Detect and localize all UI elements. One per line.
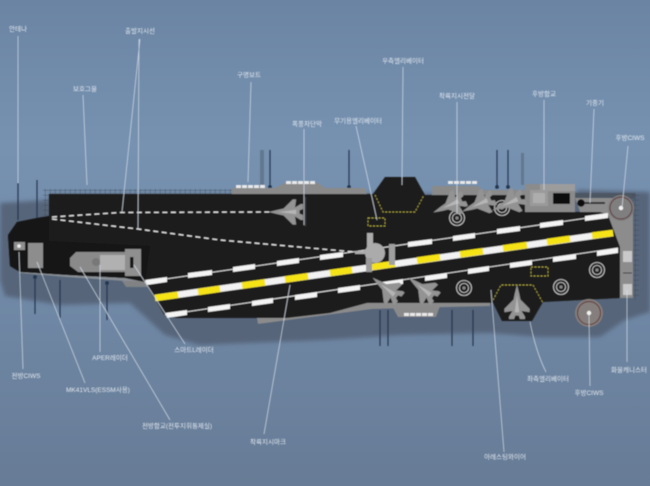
left elevator marking (493, 285, 543, 303)
label: canister: 화물캐니스터 (611, 365, 647, 374)
front lower sponson (122, 281, 150, 287)
label: landing signal: 착륙지시전달 (439, 91, 475, 100)
masts (18, 150, 524, 346)
label: front bridge: 전방함교(전투지휘통제실) (142, 421, 212, 430)
bow lower gray edge (16, 268, 146, 281)
label: blast deflector: 폭풍차단막 (292, 119, 322, 128)
jet on left elevator (504, 285, 530, 319)
lower gray sponson (257, 301, 490, 324)
right gray stern platform (575, 198, 633, 298)
flight deck hull (8, 177, 620, 321)
label: rear CIWS lower: 후방CIWS (575, 388, 604, 397)
rear bridge (525, 184, 575, 212)
side platforms and lifeboats (232, 181, 527, 317)
label: left elevator: 좌측엘리베이터 (527, 374, 569, 383)
label: rear bridge: 후방함교 (532, 89, 556, 98)
stern canisters (623, 251, 632, 295)
ship shadow (0, 190, 650, 345)
jets parked on lower deck (365, 268, 443, 309)
label: weapons elevator: 무기용엘리베이터 (334, 116, 382, 125)
label: right elevator: 우측엘리베이터 (382, 56, 424, 65)
jet on launch line (269, 199, 303, 225)
rear CIWS upper (608, 195, 634, 221)
protective net (43, 189, 639, 300)
dashed launch guide lines (52, 212, 355, 252)
label: launch guide line: 출발지시선 (125, 26, 155, 35)
front bridge and radar (70, 249, 141, 276)
left runway line (145, 213, 608, 285)
label: protective net: 보호그물 (73, 85, 97, 93)
label: crane: 기중기 (586, 98, 604, 107)
jets parked near rear bridge (428, 185, 529, 224)
rear CIWS lower (575, 299, 603, 327)
label: front CIWS: 전방CIWS (12, 371, 41, 380)
MK41 VLS (28, 243, 43, 268)
landing circles (450, 200, 604, 296)
darker nose section (8, 216, 150, 282)
weapons elevator markings (368, 218, 548, 276)
label: antenna: 안테나 (9, 24, 27, 33)
label: APER radar: APER레이더 (92, 353, 128, 362)
label: Smart-L radar: 스마트L레이더 (174, 345, 214, 354)
label: arresting wire: 아레스팅와이어 (484, 452, 526, 461)
crane (577, 199, 605, 207)
jet blast deflector (304, 197, 306, 226)
central deck equipment (355, 233, 395, 272)
label: rear CIWS upper: 후방CIWS (616, 133, 645, 142)
label: lifeboat: 구명보트 (237, 70, 261, 79)
front CIWS (14, 242, 25, 250)
label: MK41 VLS: MK41VLS(ESSM사용) (66, 385, 130, 394)
center runway line yellow and white (155, 233, 613, 298)
label: landing mark: 착륙지시마크 (250, 437, 286, 446)
right runway line (165, 248, 618, 318)
right elevator marking (375, 195, 424, 212)
